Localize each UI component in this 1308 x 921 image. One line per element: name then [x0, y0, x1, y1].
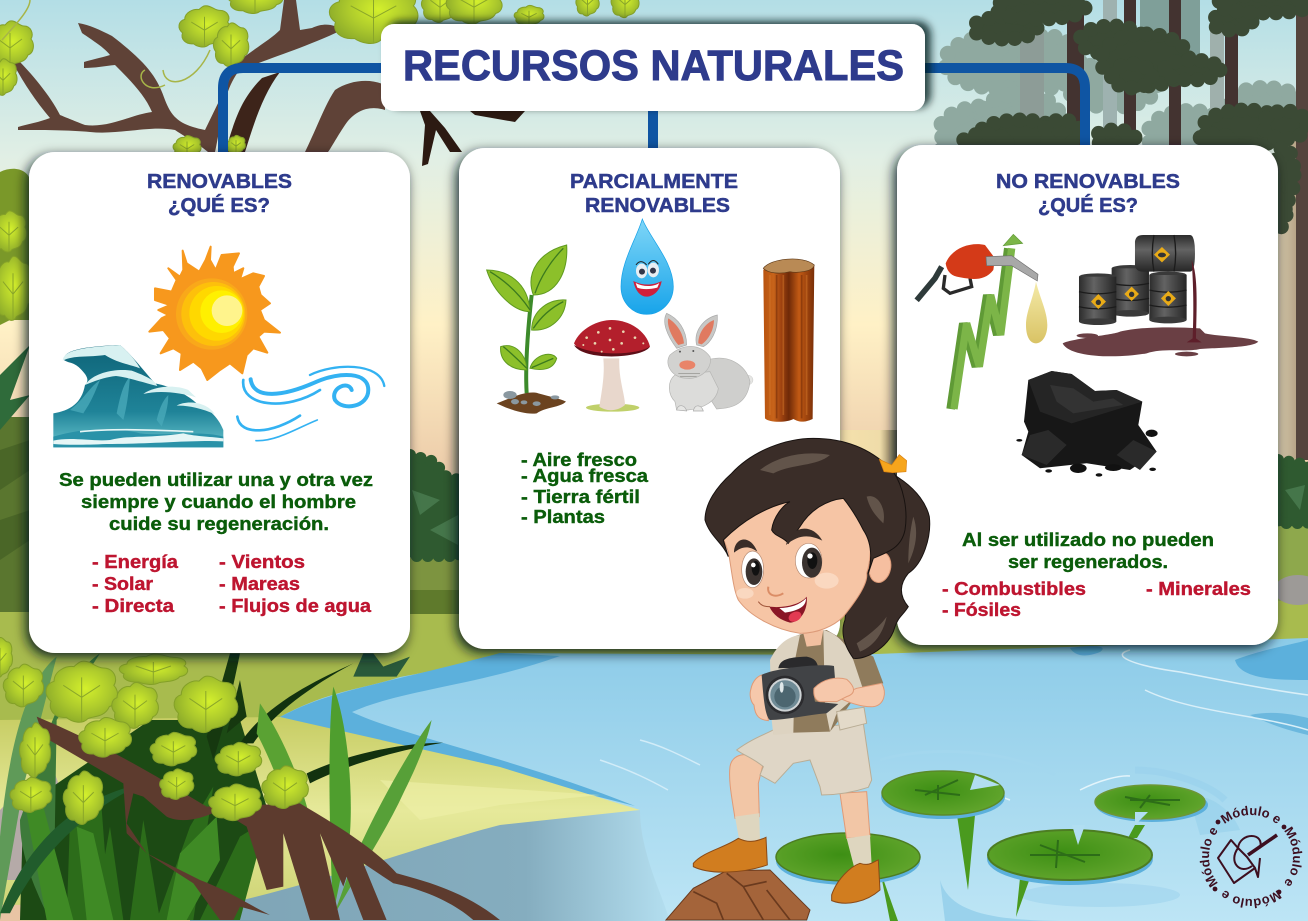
text: renovables description: siempre y cuando el hombre [81, 492, 356, 512]
list: no renovables examples: - Combustibles [942, 579, 1086, 599]
water lilies [776, 771, 1208, 921]
heading: renovables [147, 171, 292, 217]
panel: no renovables [897, 145, 1278, 645]
list: renovables examples: - Flujos de agua [219, 596, 372, 616]
background forest [935, 0, 1308, 460]
icon: wood log [763, 259, 814, 422]
list: renovables examples: - Mareas [219, 574, 300, 594]
hand left [750, 674, 768, 721]
text: renovables description: cuide su regeneración. [109, 514, 329, 534]
icon: coal [1016, 371, 1158, 477]
heading: parcialmente renovables: PARCIALMENTE [570, 171, 738, 193]
heading: no renovables [996, 171, 1180, 217]
text: renovables description [59, 470, 373, 534]
heading: no renovables: ¿QUÉ ES? [1038, 194, 1138, 217]
list: renovables examples: - Vientos [219, 552, 305, 572]
icon: fuel nozzle [917, 244, 1038, 300]
title box [381, 24, 925, 111]
heading: parcialmente renovables: RENOVABLES [585, 195, 730, 217]
list: renovables examples: - Solar [92, 574, 153, 594]
list: no renovables examples: - Minerales [1146, 579, 1251, 599]
heading: parcialmente renovables [570, 171, 738, 217]
list: renovables examples: - Energía [92, 552, 179, 572]
heading: renovables: ¿QUÉ ES? [168, 194, 270, 217]
icon: wave [53, 345, 223, 447]
hair bow [879, 455, 907, 473]
icon: book and pencil [1218, 835, 1277, 883]
shorts [737, 723, 872, 795]
logo: Módulo e: Módulo e [1200, 828, 1218, 888]
icon: rabbit [665, 313, 753, 411]
list: no renovables examples: - Fósiles [942, 600, 1021, 620]
eyes and brows [734, 529, 822, 588]
text: renovables description: Se pueden utilizar una y otra vez [59, 470, 373, 490]
arm [837, 683, 884, 707]
list: renovables examples [92, 552, 372, 616]
panel: renovables [29, 152, 410, 653]
panel: parcialmente renovables [459, 148, 840, 649]
tree branches top left [14, 0, 525, 166]
icon: mushroom [574, 320, 650, 412]
list: no renovables examples [942, 579, 1251, 620]
vine branch [37, 717, 500, 920]
hair front [705, 438, 906, 573]
rock behind plants [0, 760, 67, 880]
list: parcialmente renovables: - Tierra fértil [521, 487, 640, 507]
icon: water drop [621, 219, 673, 314]
spiky grass blades [0, 653, 443, 920]
icon: oil barrels [1063, 235, 1258, 356]
ground [0, 345, 1308, 730]
logo: Módulo e [1200, 806, 1302, 908]
text: no renovables description: ser regenerados. [1008, 552, 1168, 572]
icon: green rising arrow [951, 234, 1023, 409]
foliage top and left [0, 0, 639, 325]
legs [730, 755, 872, 867]
pale tree trunk between cards [840, 430, 897, 620]
girl with camera [666, 438, 930, 920]
cheeks and nose [736, 573, 839, 599]
pond [0, 638, 1308, 921]
right edge trunks [1278, 0, 1308, 460]
logo: Módulo e: Módulo e [1222, 890, 1282, 908]
vine leaves [0, 637, 308, 824]
hand right [814, 678, 854, 702]
smile [758, 597, 807, 624]
list: renovables examples: - Directa [92, 596, 175, 616]
icon: fuel drop [1026, 282, 1047, 343]
shoes [693, 837, 880, 903]
icon: wind [237, 367, 384, 441]
shirt and vest [770, 630, 883, 735]
icon: sun [149, 247, 280, 380]
list: parcialmente renovables: - Aire fresco [521, 450, 637, 470]
list: parcialmente renovables: - Agua fresca [521, 466, 649, 486]
connector lines [223, 68, 1085, 155]
logo: Módulo e: Módulo e [1220, 806, 1280, 824]
heading: no renovables: NO RENOVABLES [996, 171, 1180, 193]
distant bushes [410, 455, 1308, 556]
foreground plants and vine [0, 637, 500, 920]
logo: Módulo e: Módulo e [1284, 826, 1302, 886]
text: no renovables description [962, 530, 1214, 572]
icon: plant [487, 245, 567, 414]
heading: renovables: RENOVABLES [147, 171, 292, 193]
camera [762, 657, 838, 720]
list: parcialmente renovables: - Plantas [521, 507, 605, 527]
title: RECURSOS NATURALES [403, 42, 904, 90]
rock [666, 870, 810, 920]
face [720, 487, 870, 633]
ear [866, 550, 894, 585]
text: no renovables description: Al ser utilizado no pueden [962, 530, 1214, 550]
list: parcialmente renovables [521, 450, 649, 527]
hair back [843, 463, 930, 658]
